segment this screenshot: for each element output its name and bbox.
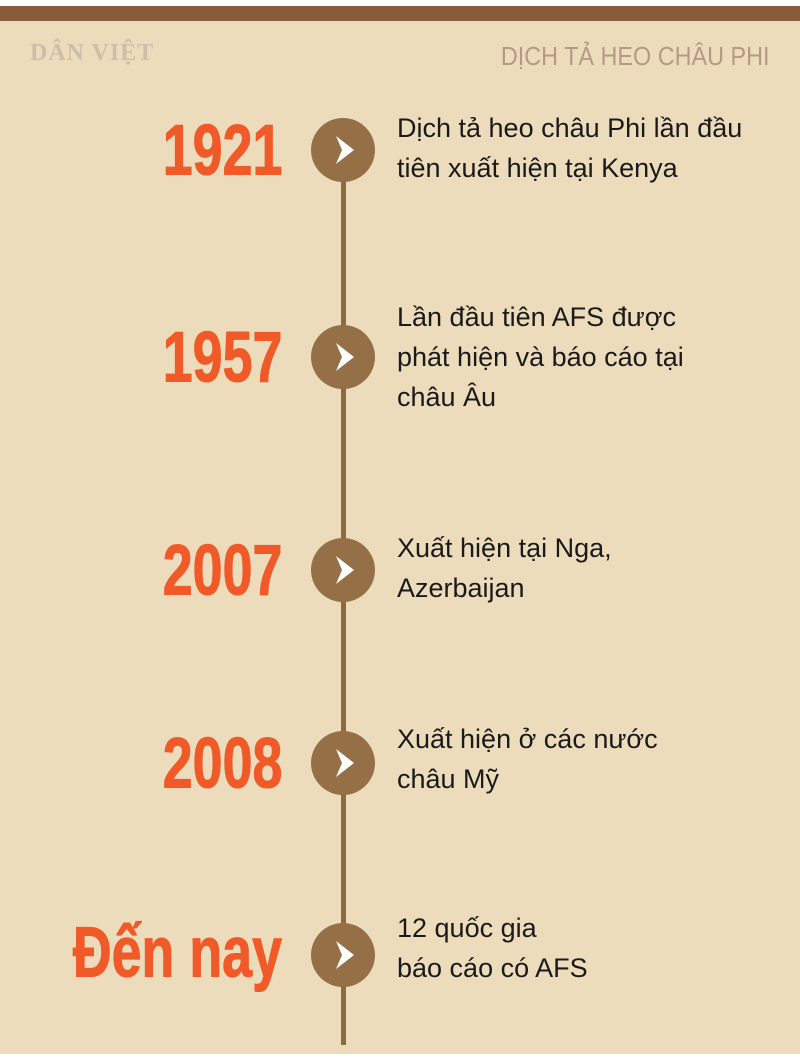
header title: DỊCH TẢ HEO CHÂU PHI <box>501 41 770 71</box>
desc den nay: báo cáo có AFS <box>397 953 588 983</box>
desc 1957: châu Âu <box>397 382 496 412</box>
desc 1921 <box>397 113 742 183</box>
desc 2008: châu Mỹ <box>397 764 499 794</box>
year 1957: 1957 <box>162 317 282 397</box>
desc 2007 <box>397 533 612 603</box>
year 2008: 2008 <box>162 723 282 803</box>
node 1921 <box>311 118 375 182</box>
desc 1921: Dịch tả heo châu Phi lần đầu <box>397 113 742 143</box>
year den nay: Đến nay <box>73 912 282 992</box>
desc 2008: Xuất hiện ở các nước <box>397 724 658 754</box>
year 2007: 2007 <box>162 530 282 610</box>
desc den nay: 12 quốc gia <box>397 913 537 943</box>
year 1921: 1921 <box>162 110 282 190</box>
timeline line <box>341 150 346 1045</box>
node 1957 <box>311 325 375 389</box>
node den nay <box>311 923 375 987</box>
desc 1957: Lần đầu tiên AFS được <box>397 302 676 332</box>
node 2008 <box>311 731 375 795</box>
desc 1957: phát hiện và báo cáo tại <box>397 342 684 372</box>
desc 2007: Azerbaijan <box>397 573 525 603</box>
desc 2007: Xuất hiện tại Nga, <box>397 533 612 563</box>
desc den nay <box>397 913 588 983</box>
desc 2008 <box>397 724 658 794</box>
node 2007 <box>311 538 375 602</box>
logo: DÂN VIỆT <box>30 40 154 66</box>
desc 1921: tiên xuất hiện tại Kenya <box>397 153 678 183</box>
desc 1957 <box>397 302 684 412</box>
